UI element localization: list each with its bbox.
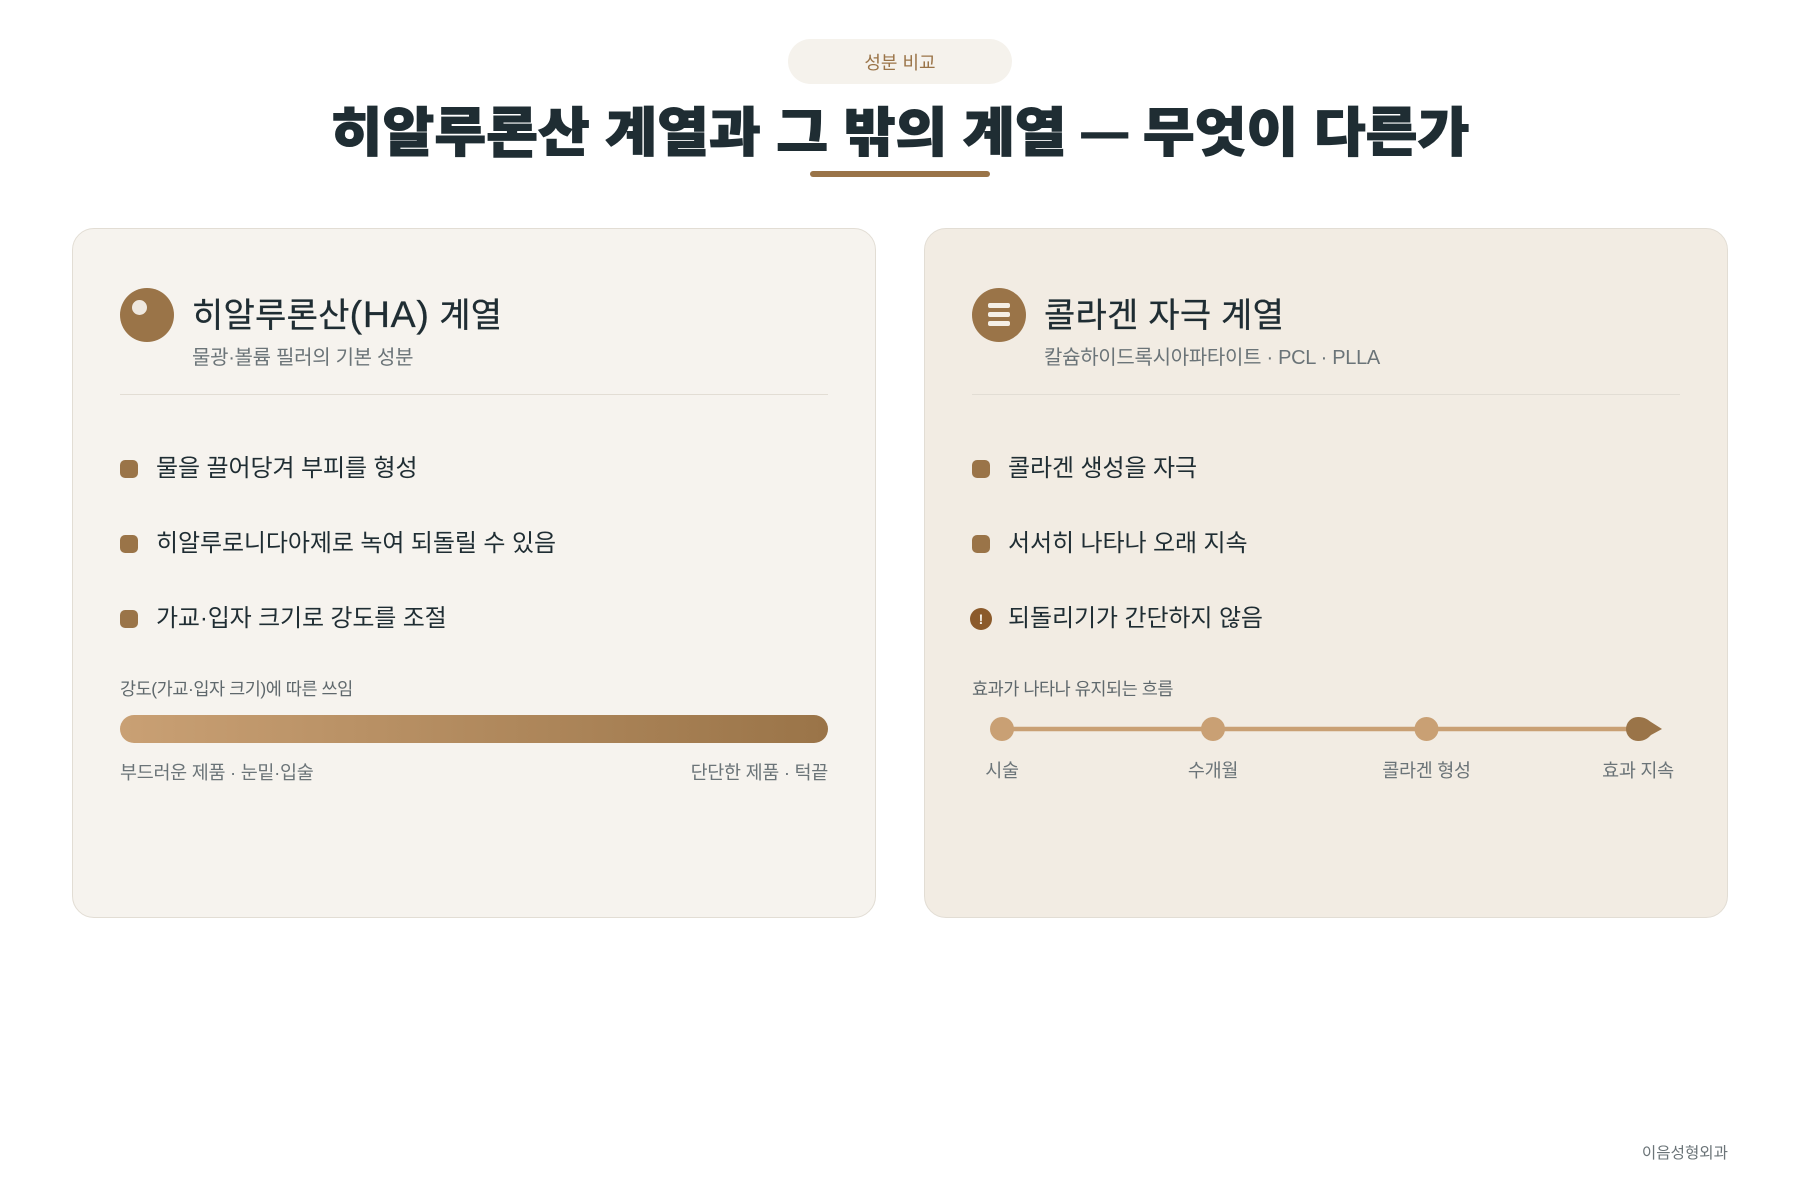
bullet text 1: 콜라겐 생성을 자극 xyxy=(1008,455,1197,482)
bar caption: 강도(가교·입자 크기)에 따른 쓰임 xyxy=(120,679,353,699)
timeline xyxy=(990,717,1662,741)
footer brand: 이음성형외과 xyxy=(1642,1145,1728,1162)
bullet icon 2 xyxy=(972,535,990,553)
icon: warning: ! xyxy=(979,611,983,627)
badge: 성분 비교: 성분 비교 xyxy=(864,53,936,73)
bullet icon 1 xyxy=(120,460,138,478)
bullet text 2: 히알루로니다아제로 녹여 되돌릴 수 있음 xyxy=(156,530,556,557)
gradient strength bar xyxy=(120,715,828,743)
panel subtitle: HA: 물광·볼륨 필러의 기본 성분 xyxy=(192,347,413,369)
icon: droplet sphere xyxy=(120,288,174,342)
title: 히알루론산 계열과 그 밖의 계열 — 무엇이 다른가 xyxy=(331,104,1469,162)
bullet text 3: 가교·입자 크기로 강도를 조절 xyxy=(156,605,447,632)
timeline label 2: 수개월 xyxy=(1188,760,1238,781)
icon: layered bars xyxy=(972,288,1026,342)
bullet text 2: 서서히 나타나 오래 지속 xyxy=(1008,530,1248,557)
bullet text 1: 물을 끌어당겨 부피를 형성 xyxy=(156,455,417,482)
badge: 성분 비교 xyxy=(788,39,1012,84)
bullet icon 1 xyxy=(972,460,990,478)
bullet icon 3 xyxy=(120,610,138,628)
panel heading: collagen: 콜라겐 자극 계열 xyxy=(1044,297,1284,335)
panel: hyaluronic acid xyxy=(72,228,876,918)
panel: collagen stimulators xyxy=(924,228,1728,918)
panel heading: HA: 히알루론산(HA) 계열 xyxy=(192,293,502,335)
timeline label 3: 콜라겐 형성 xyxy=(1382,760,1471,781)
title underline xyxy=(810,171,990,177)
icon: warning xyxy=(970,608,992,630)
bullet icon 2 xyxy=(120,535,138,553)
bar label right: 단단한 제품 · 턱끝 xyxy=(691,762,828,783)
timeline label 4: 효과 지속 xyxy=(1602,760,1674,781)
bullet text 3: 되돌리기가 간단하지 않음 xyxy=(1008,605,1263,632)
bar label left: 부드러운 제품 · 눈밑·입술 xyxy=(120,762,313,783)
timeline caption: 효과가 나타나 유지되는 흐름 xyxy=(972,679,1173,699)
timeline label 1: 시술 xyxy=(985,760,1019,781)
panel subtitle: collagen: 칼슘하이드록시아파타이트 · PCL · PLLA xyxy=(1044,347,1380,369)
